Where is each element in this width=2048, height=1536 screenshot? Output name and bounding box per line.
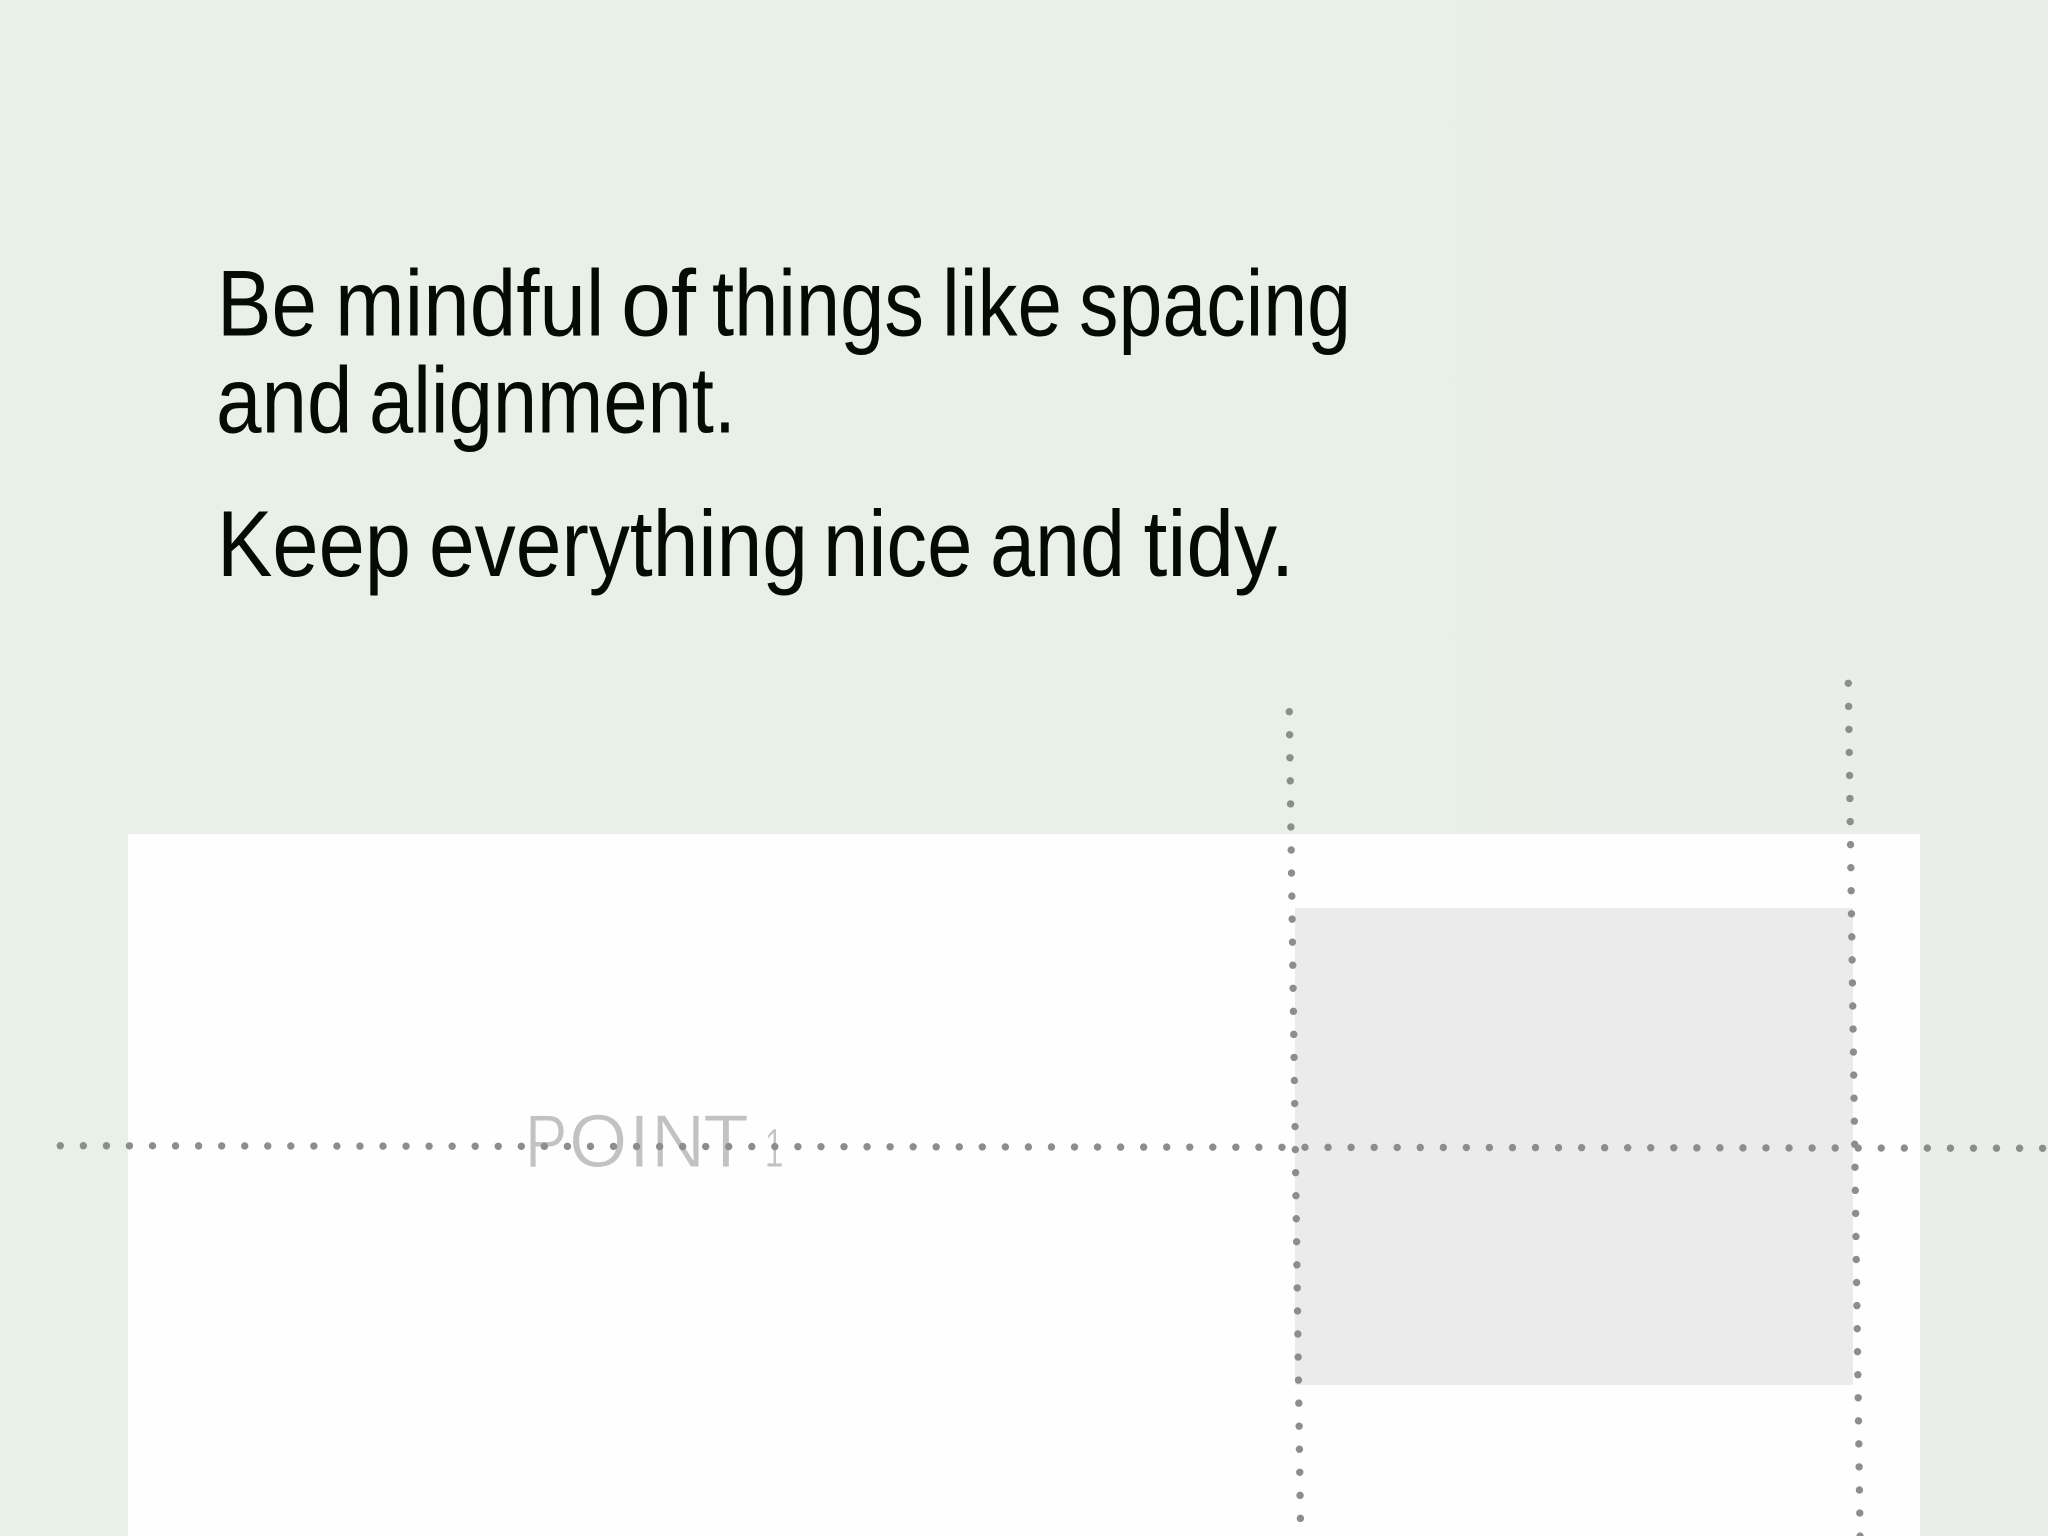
guide: left vertical dotted line [1289, 712, 1300, 1519]
heading line 2 [216, 348, 736, 452]
heading line 3: everything [429, 491, 808, 596]
heading line 3: tidy. [1144, 491, 1294, 596]
guide: horizontal dotted line [60, 1146, 2048, 1148]
heading line 3: nice [823, 491, 972, 596]
heading line 3: and [990, 491, 1125, 596]
heading line 1: like [942, 250, 1062, 356]
heading line 2: and [216, 348, 352, 452]
heading line 2: alignment. [369, 348, 736, 452]
panel: grey image placeholder [1295, 908, 1853, 1385]
label: POINT 1: OINT [569, 1099, 749, 1183]
heading line 1: Be [217, 250, 317, 356]
panel: white layout area [128, 834, 1920, 1536]
label: POINT 1: P [525, 1099, 567, 1183]
heading line 3: Keep [217, 491, 411, 596]
heading line 1 [217, 250, 1351, 356]
heading line 1: spacing [1079, 250, 1351, 356]
heading line 3 [217, 491, 1294, 596]
heading line 1: things [712, 250, 924, 356]
label: POINT 1 [525, 1099, 784, 1183]
heading line 1: mindful [335, 250, 604, 356]
label: POINT 1: 1 [764, 1117, 784, 1179]
guide: right vertical dotted line [1848, 683, 1860, 1536]
heading line 1: of [621, 250, 697, 356]
heading text block [216, 250, 1351, 596]
